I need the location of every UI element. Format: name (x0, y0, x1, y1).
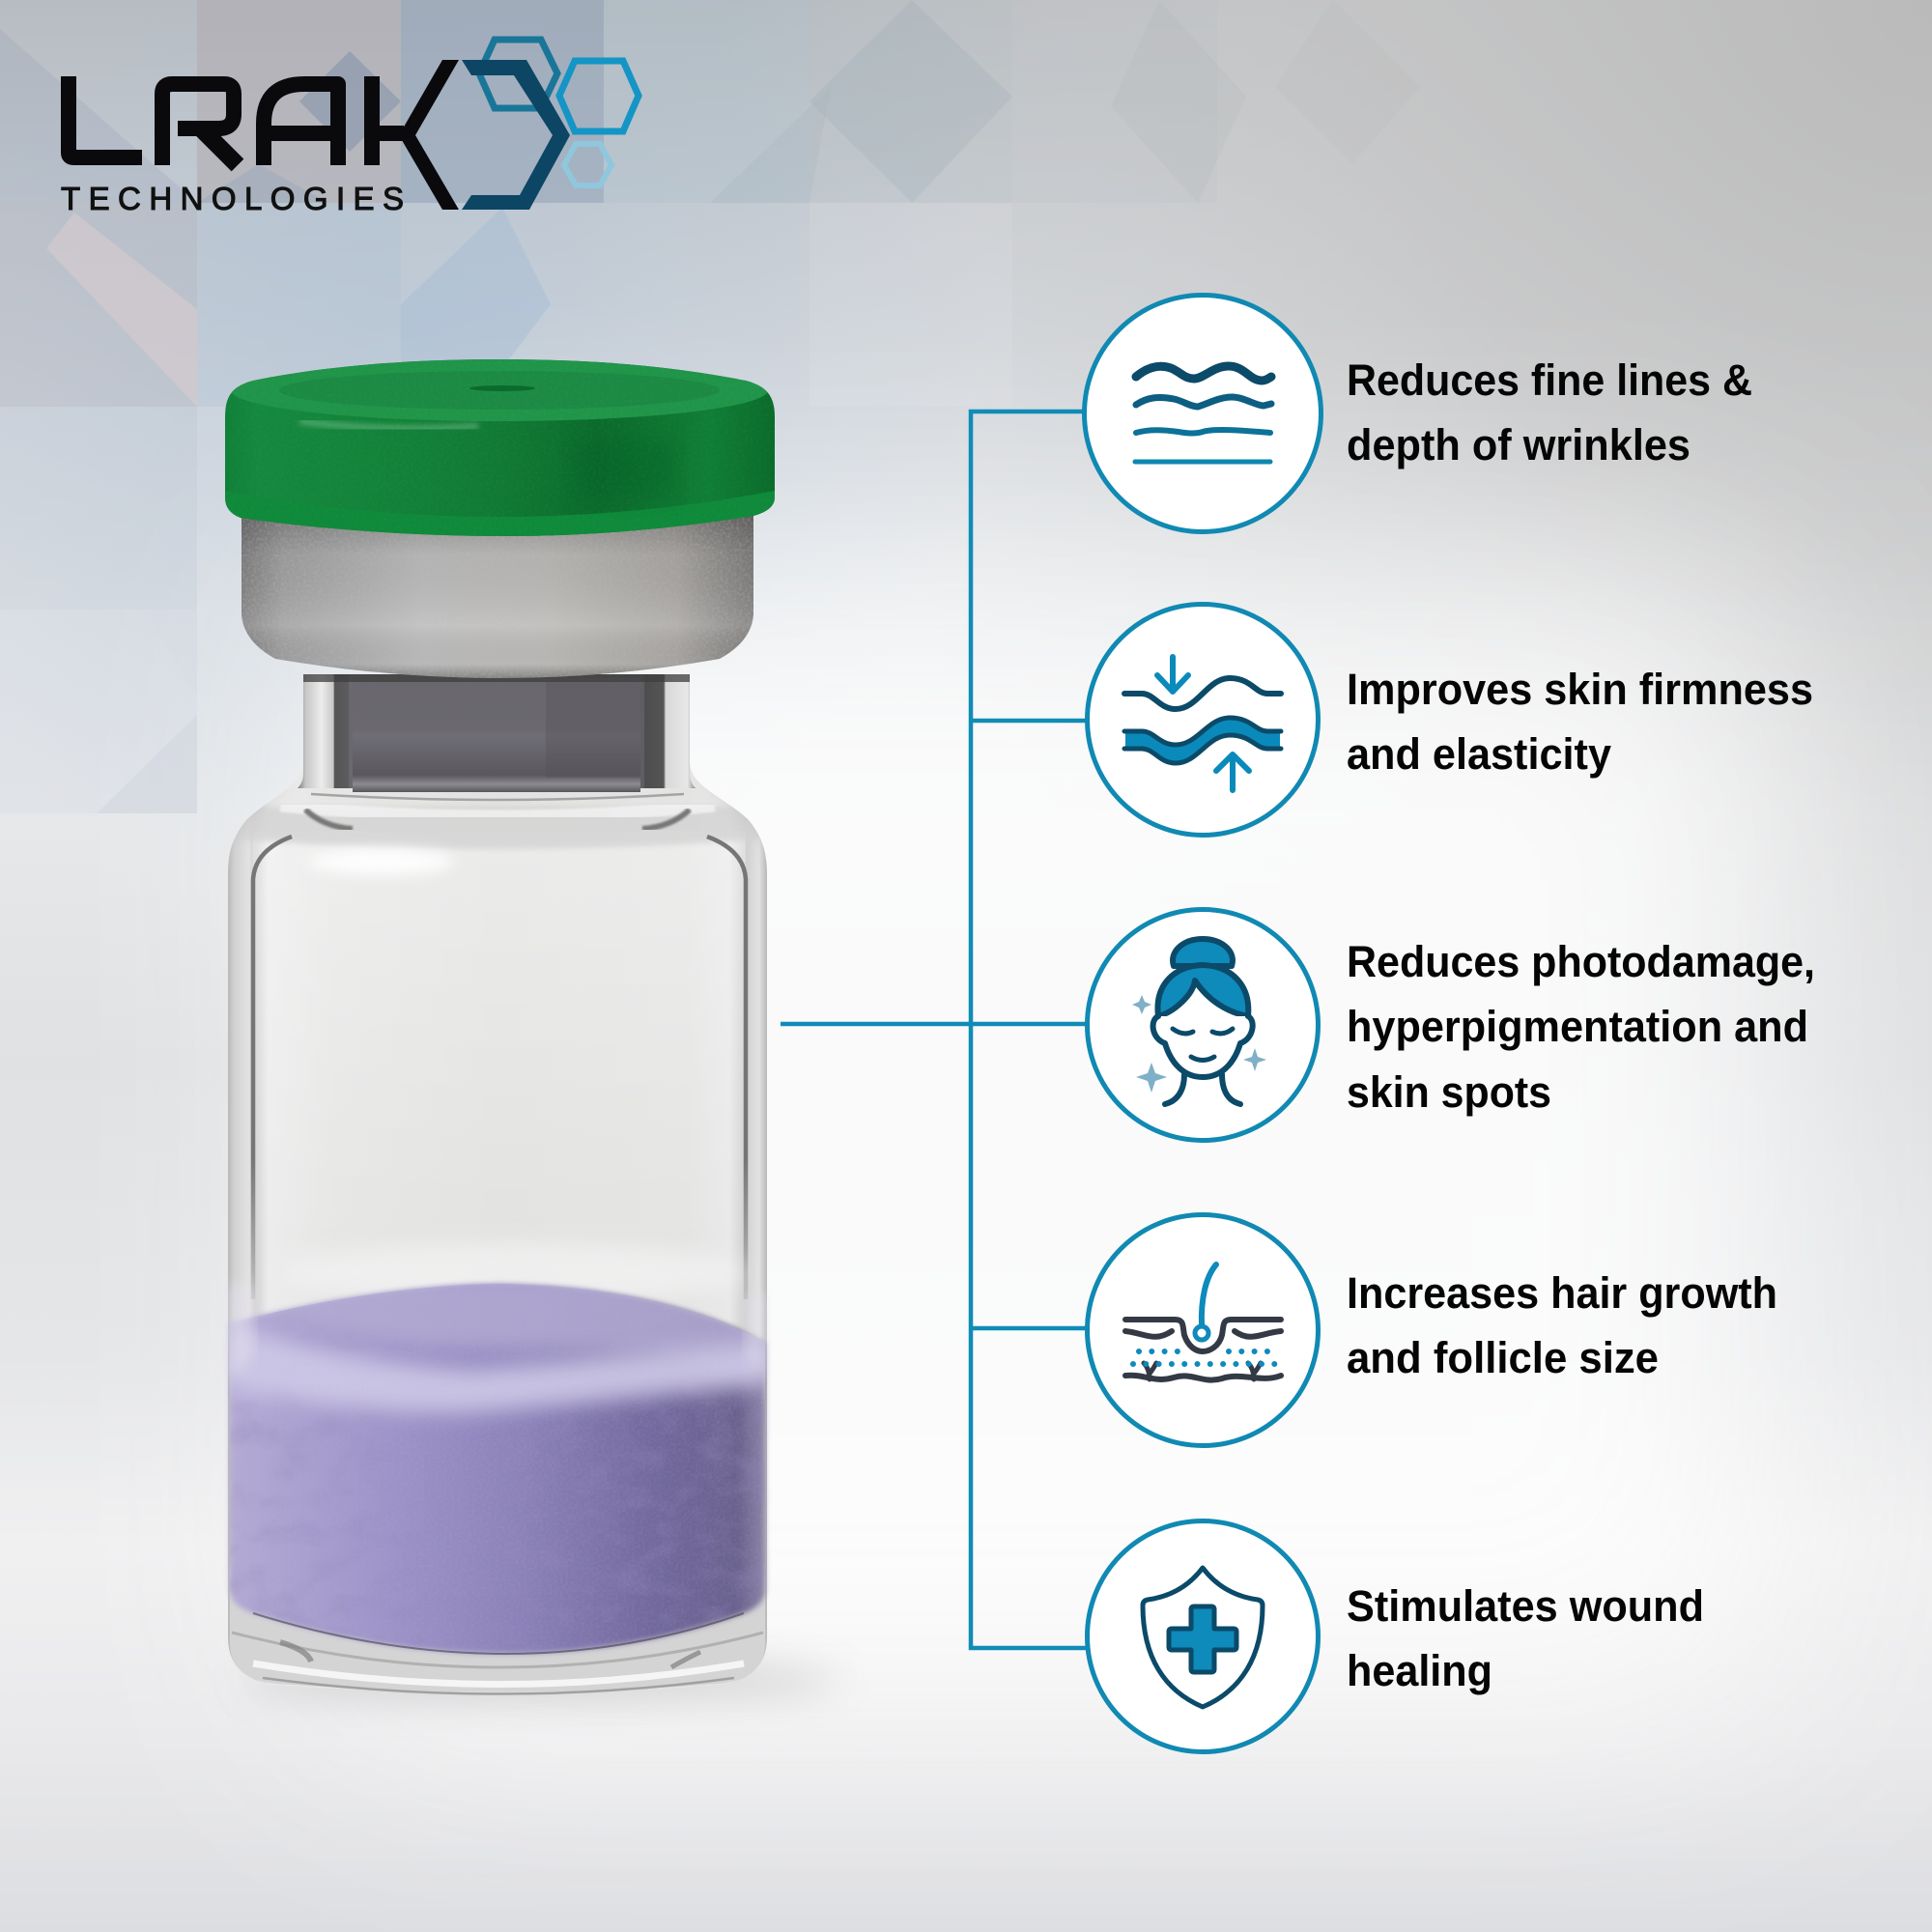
vial neck and stopper (298, 674, 696, 792)
text block: Improves skin firmness (1347, 665, 1813, 714)
text block (1347, 1268, 1777, 1382)
text block: Increases hair growth (1347, 1268, 1777, 1318)
benefit: firmness and elasticity (1088, 605, 1813, 835)
vial green cap (222, 357, 778, 541)
vial glass body (228, 676, 767, 1693)
icon: woman's face (1088, 910, 1318, 1140)
benefit: photodamage (1088, 910, 1815, 1140)
text block: and follicle size (1347, 1333, 1659, 1382)
icon: skin compression (1088, 605, 1318, 835)
text block (1347, 355, 1752, 469)
text block (1347, 937, 1815, 1117)
text block: hyperpigmentation and (1347, 1002, 1808, 1051)
text block: skin spots (1347, 1067, 1551, 1117)
text block: and elasticity (1347, 729, 1611, 779)
text block: Reduces photodamage, (1347, 937, 1815, 986)
logo wordmark LRAK (69, 76, 404, 165)
text block: healing (1347, 1646, 1492, 1695)
benefit: wound healing (1088, 1520, 1704, 1752)
vial powder (222, 1242, 773, 1692)
vial glass base (232, 1613, 763, 1694)
logo (61, 40, 639, 216)
connector lines (781, 412, 1088, 1648)
logo bracket (462, 60, 570, 210)
benefit: fine lines and wrinkles (1084, 296, 1752, 531)
text block: Stimulates wound (1347, 1581, 1704, 1631)
benefit: hair growth (1088, 1215, 1777, 1445)
vial shadow (242, 1660, 840, 1702)
text block: depth of wrinkles (1347, 420, 1690, 469)
icon: shield with cross (1088, 1520, 1318, 1752)
logo hexagons (479, 40, 639, 185)
geometric tile pattern (0, 0, 1420, 813)
text block (1347, 665, 1813, 779)
vial silver crimp (242, 516, 753, 678)
logo subtitle: TECHNOLOGIES (61, 181, 404, 216)
icon: wrinkle lines (1084, 296, 1321, 531)
text block (1347, 1581, 1704, 1695)
icon: hair follicle (1088, 1215, 1318, 1445)
vial (222, 357, 778, 1694)
text block: Reduces fine lines & (1347, 355, 1752, 405)
